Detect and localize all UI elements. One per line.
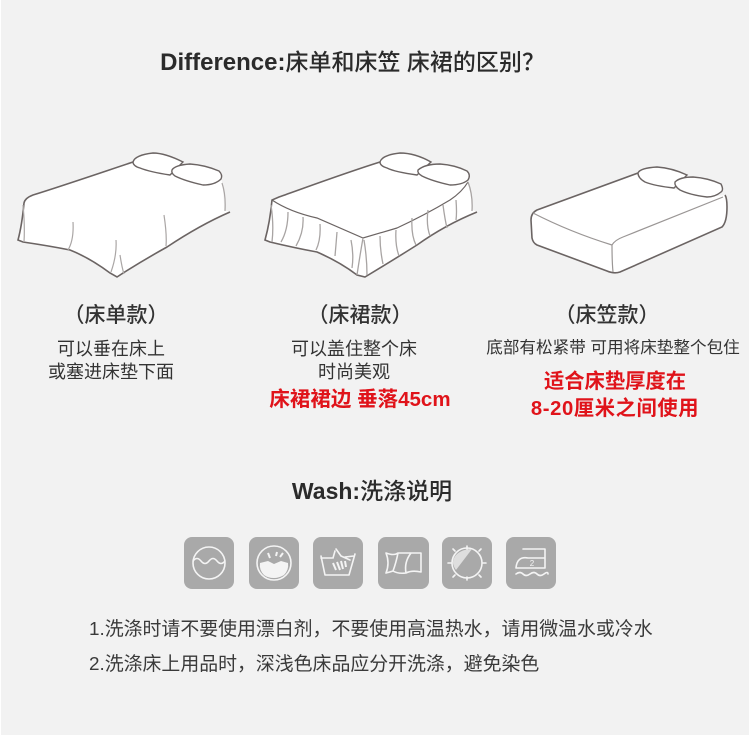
icon row: wash instructions [184,537,556,589]
illustration: flat sheet bed [17,152,230,278]
illustration: fitted sheet bed [530,166,728,274]
icon: water drum [249,537,299,589]
text: flat sheet description: 可以垂在床上 [57,339,165,359]
text: wash note 1: 1.洗涤时请不要使用漂白剂，不要使用高温热水，请用微温水或冷水 [89,619,653,640]
heading: wash: Wash:洗涤说明 [292,478,452,504]
callout: fitted sheet thickness: 8-20厘米之间使用 [531,398,699,420]
callout: bed skirt drop: 床裙裙边 垂落45cm [269,388,451,411]
heading: fitted sheet: （床笠款） [554,304,660,327]
icon: hand wash [313,537,363,589]
title: Difference:床单和床笠 床裙的区别？ [160,49,545,76]
icon: tumble dry dial [442,537,492,589]
heading: bed skirt: （床裙款） [308,304,412,327]
text: bed skirt description: 时尚美观 [318,362,390,382]
heading: flat sheet: （床单款） [64,304,168,327]
text: bed skirt description: 可以盖住整个床 [291,339,417,359]
icon: iron [506,537,556,589]
text: wash note 2: 2.洗涤床上用品时，深浅色床品应分开洗涤，避免染色 [89,654,539,675]
icon: iron: 2 [530,559,535,568]
text: flat sheet description: 或塞进床垫下面 [48,362,174,382]
text: bed skirt description [291,339,417,382]
text: flat sheet description [48,339,174,382]
icon: do not wring [378,537,429,589]
icon: machine wash [184,537,234,589]
callout: fitted sheet thickness: 适合床垫厚度在 [544,371,686,393]
text: fitted sheet description: 底部有松紧带 可用将床垫整个包住 [486,338,740,357]
illustration: bed skirt bed [264,152,478,278]
callout: fitted sheet thickness [531,370,699,420]
